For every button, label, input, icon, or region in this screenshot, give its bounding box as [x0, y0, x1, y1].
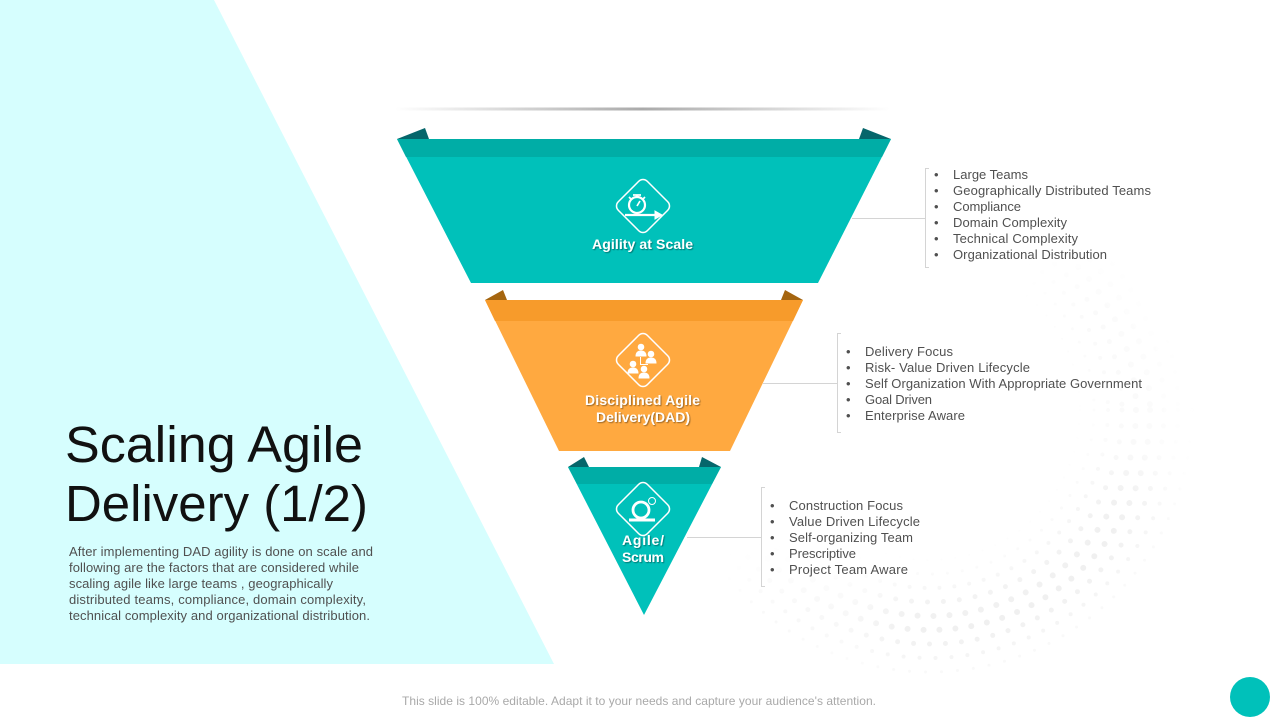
bullet list: middle tier: Enterprise Aware	[865, 408, 965, 423]
description text: After implementing DAD agility is done on scale and	[69, 544, 373, 559]
bullet list: bottom tier: •	[770, 546, 775, 561]
bullet list: top tier: Large Teams	[953, 167, 1028, 182]
bullet list: bottom tier: Value Driven Lifecycle	[789, 514, 920, 529]
connector and bracket: top list	[852, 168, 929, 268]
label: Disciplined Agile Delivery(DAD): Delivery(DAD)	[596, 409, 690, 425]
bullet list: top tier: •	[934, 231, 939, 246]
bullet list: bottom tier	[770, 498, 920, 577]
bullet list: middle tier: •	[846, 344, 851, 359]
bullet list: top tier: •	[934, 247, 939, 262]
bullet list: middle tier: •	[846, 408, 851, 423]
icon: stopwatch with arrow	[614, 177, 672, 235]
label: Agile/Scrum	[622, 532, 664, 565]
bullet list: middle tier: Goal Driven	[865, 392, 932, 407]
connector and bracket: middle list	[763, 334, 841, 432]
left background panel	[0, 0, 554, 664]
bullet list: middle tier: •	[846, 360, 851, 375]
bullet list: middle tier: Self Organization With Appropriate Government	[865, 376, 1142, 391]
bullet list: bottom tier: •	[770, 530, 775, 545]
bullet list: bottom tier: Construction Focus	[789, 498, 904, 513]
title	[65, 416, 368, 532]
teal corner circle	[1230, 677, 1270, 717]
bullet list: top tier: •	[934, 199, 939, 214]
bullet list: top tier: Organizational Distribution	[953, 247, 1107, 262]
bullet list: middle tier: •	[846, 376, 851, 391]
bullet list: middle tier: Delivery Focus	[865, 344, 954, 359]
halftone dot decoration	[859, 470, 1154, 660]
bullet list: middle tier	[846, 344, 1142, 423]
bullet list: bottom tier: •	[770, 514, 775, 529]
bullet list: top tier: •	[934, 215, 939, 230]
description text: following are the factors that are considered while	[69, 560, 359, 575]
bullet list: top tier: Geographically Distributed Teams	[953, 183, 1152, 198]
label: Agile/Scrum: Scrum	[622, 549, 664, 565]
description text	[69, 544, 373, 623]
bullet list: top tier: Technical Complexity	[953, 231, 1078, 246]
bullet list: bottom tier: Prescriptive	[789, 546, 856, 561]
label: Disciplined Agile Delivery(DAD): Disciplined Agile	[585, 392, 700, 408]
bullet list: top tier	[934, 167, 1152, 262]
connector and bracket: bottom list	[687, 488, 765, 586]
bullet list: top tier: •	[934, 167, 939, 182]
bullet list: top tier: •	[934, 183, 939, 198]
icon: scrum cycle	[614, 480, 672, 538]
bullet list: bottom tier: •	[770, 498, 775, 513]
bullet list: top tier: Domain Complexity	[953, 215, 1068, 230]
funnel tier: Agile/Scrum	[568, 457, 721, 615]
bullet list: bottom tier: Project Team Aware	[789, 562, 908, 577]
label: Agility at Scale: Agility at Scale	[592, 236, 693, 252]
bullet list: middle tier: •	[846, 392, 851, 407]
bullet list: top tier: Compliance	[953, 199, 1021, 214]
footer note: This slide is 100% editable. Adapt it to your needs and capture your audience's attention.	[402, 694, 876, 708]
label: Disciplined Agile Delivery(DAD)	[585, 392, 700, 425]
bullet list: bottom tier: •	[770, 562, 775, 577]
title: Delivery (1/2)	[65, 475, 368, 532]
description text: scaling agile like large teams , geographically	[69, 576, 334, 591]
bullet list: middle tier: Risk- Value Driven Lifecycle	[865, 360, 1030, 375]
description text: distributed teams, compliance, domain complexity,	[69, 592, 366, 607]
label: Agile/Scrum: Agile/	[622, 532, 664, 548]
funnel top shadow	[395, 108, 890, 110]
description text: technical complexity and organizational distribution.	[69, 608, 370, 623]
bullet list: bottom tier: Self-organizing Team	[789, 530, 913, 545]
title: Scaling Agile	[65, 416, 363, 473]
funnel tier: Disciplined Agile Delivery	[485, 290, 803, 451]
funnel tier: Agility at Scale	[397, 128, 891, 283]
icon: connected people	[614, 331, 672, 389]
